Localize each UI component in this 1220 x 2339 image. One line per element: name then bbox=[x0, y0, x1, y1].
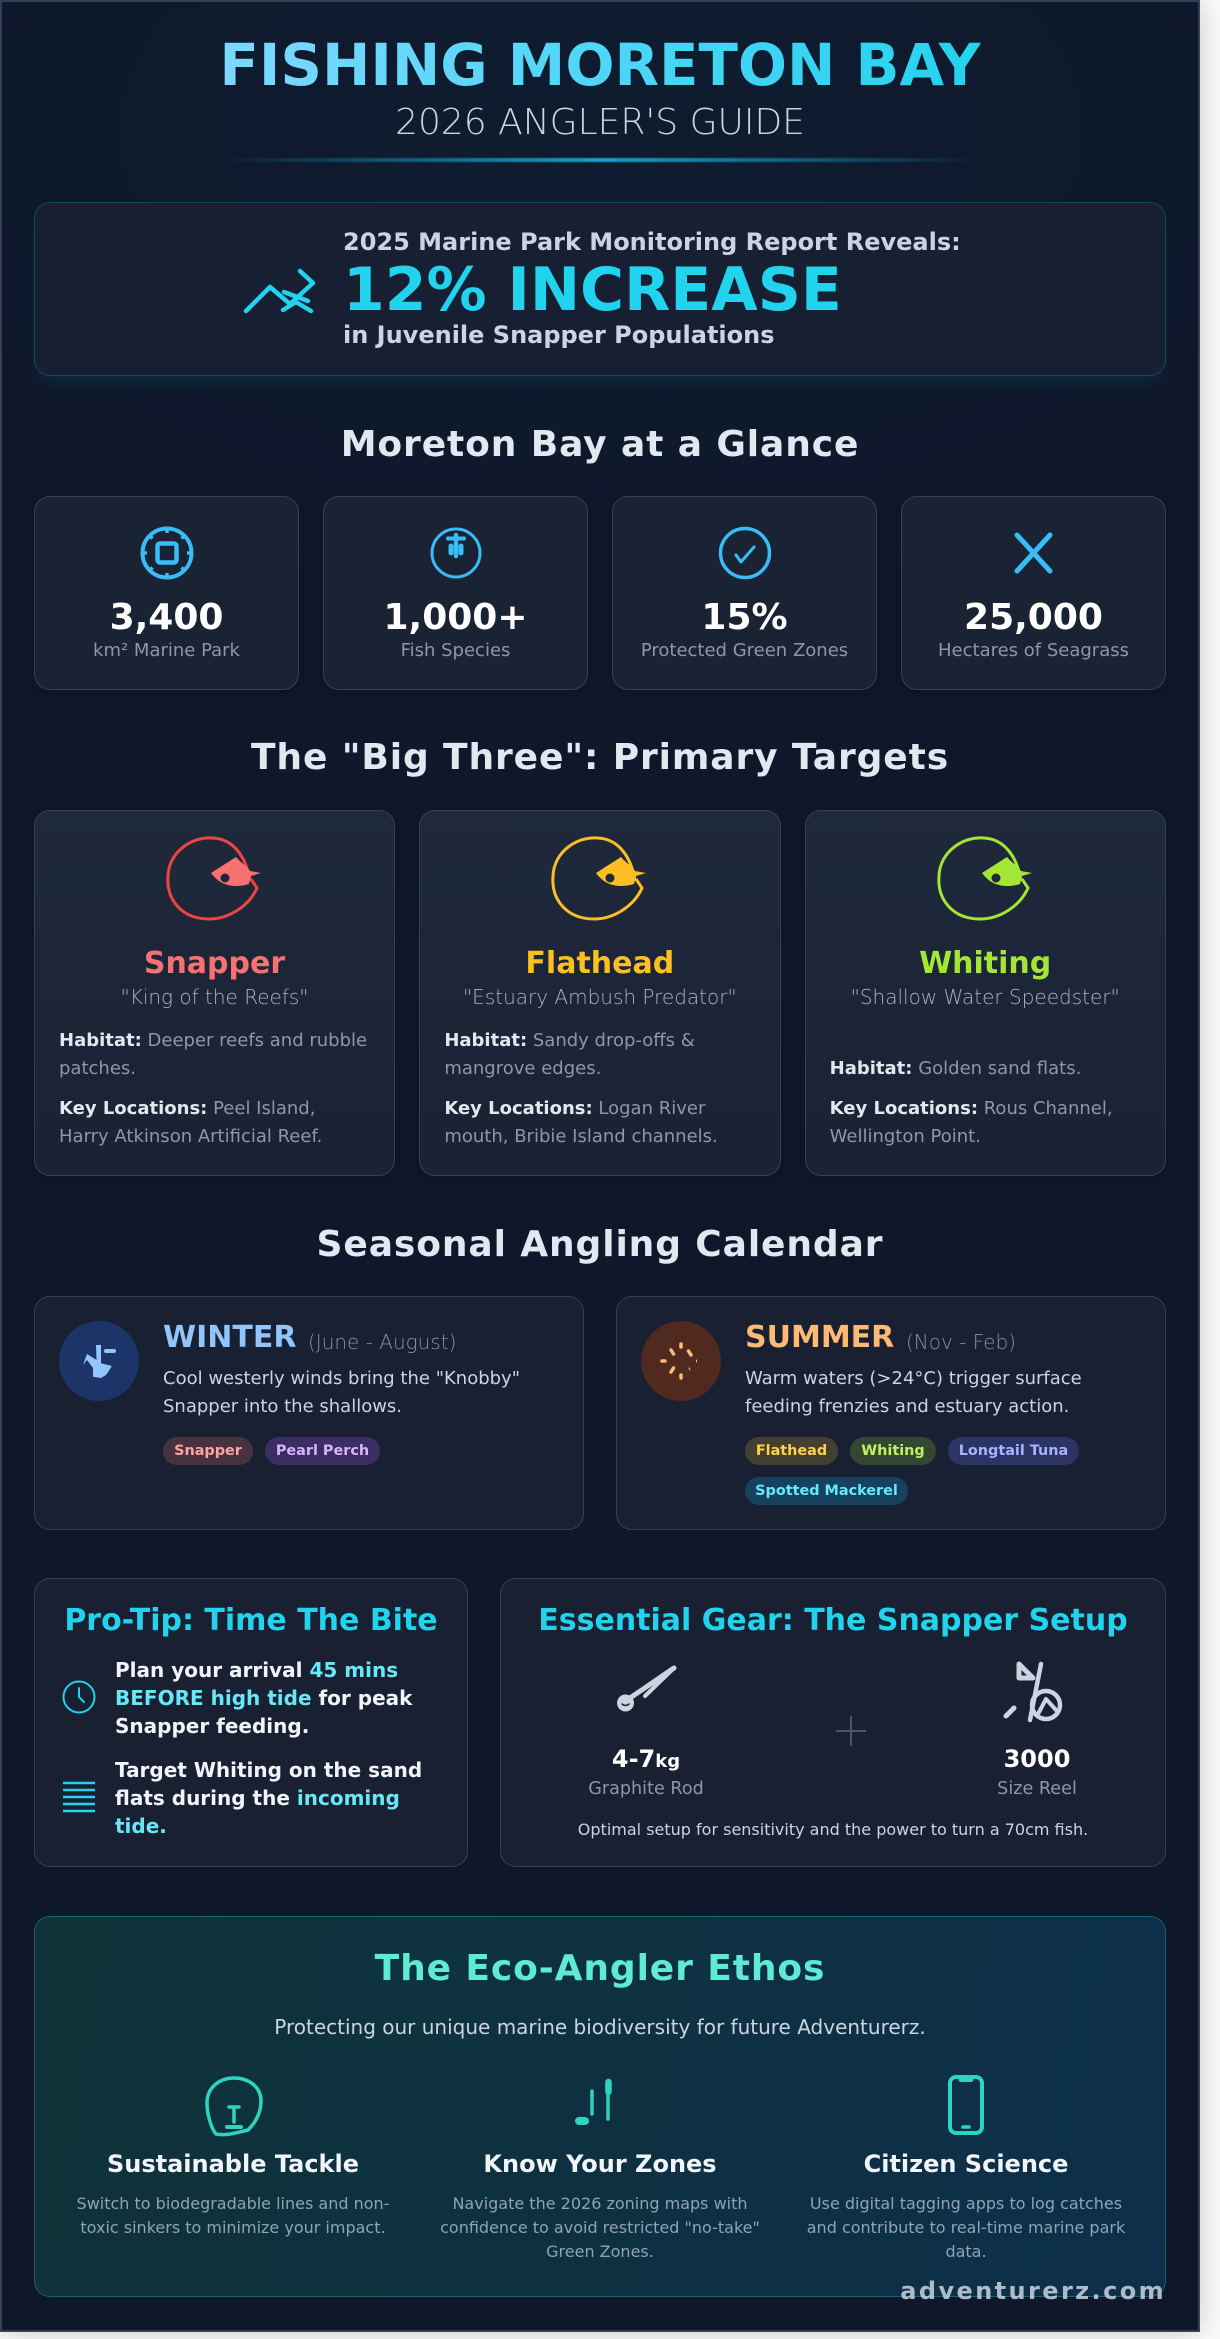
column title: Know Your Zones bbox=[483, 2150, 717, 2178]
key locations: Key Locations: Peel Island, bbox=[59, 1098, 315, 1119]
column text: Switch to biodegradable lines and non- bbox=[77, 2194, 389, 2213]
nickname: "King of the Reefs" bbox=[120, 985, 308, 1009]
label: km² Marine Park bbox=[93, 640, 240, 661]
column title: Sustainable Tackle bbox=[107, 2150, 359, 2178]
season dates: (June - August) bbox=[308, 1330, 456, 1354]
stat card: marine park bbox=[34, 496, 299, 690]
stat card: species bbox=[323, 496, 588, 690]
habitat: Habitat: Sandy drop-offs & bbox=[444, 1030, 695, 1051]
reel label: Size Reel bbox=[997, 1779, 1077, 1799]
nickname: "Estuary Ambush Predator" bbox=[463, 985, 737, 1009]
heading: big three: The "Big Three": Primary Targets bbox=[251, 737, 949, 778]
tip text: whiting bbox=[115, 1758, 422, 1838]
tip text: arrival: Snapper feeding. bbox=[115, 1714, 309, 1738]
icon: whiting bbox=[937, 836, 1032, 920]
report outro: in Juvenile Snapper Populations bbox=[343, 321, 774, 349]
species card: whiting bbox=[805, 810, 1166, 1176]
heading: calendar: Seasonal Angling Calendar bbox=[317, 1224, 883, 1265]
panel: pro tip bbox=[34, 1578, 468, 1867]
heading: The Eco-Angler Ethos bbox=[375, 1948, 825, 1989]
habitat bbox=[444, 1030, 695, 1079]
habitat: Habitat: Golden sand flats. bbox=[830, 1058, 1081, 1079]
column: citizen science bbox=[807, 2075, 1126, 2261]
label: Hectares of Seagrass bbox=[938, 640, 1129, 661]
tag: whiting bbox=[850, 1437, 936, 1465]
key locations: Key Locations: Rous Channel, bbox=[830, 1098, 1113, 1119]
icon: clock bbox=[62, 1680, 96, 1714]
panel: headline stat bbox=[34, 202, 1166, 376]
season name: WINTER bbox=[163, 1320, 296, 1355]
icon: summer badge bbox=[641, 1321, 721, 1401]
description: Snapper into the shallows. bbox=[163, 1396, 402, 1417]
label: Protected Green Zones bbox=[641, 640, 848, 661]
key locations: Harry Atkinson Artificial Reef. bbox=[59, 1126, 322, 1147]
icon: sinker bbox=[205, 2076, 263, 2136]
tip text: arrival: Plan your arrival 45 mins bbox=[115, 1658, 398, 1682]
key locations bbox=[830, 1098, 1113, 1147]
icon: rising trend bbox=[244, 268, 316, 314]
gear note: Optimal setup for sensitivity and the power to turn a 70cm fish. bbox=[578, 1820, 1088, 1839]
heading: Essential Gear: The Snapper Setup bbox=[538, 1603, 1128, 1638]
value: 1,000+ bbox=[383, 597, 528, 638]
panel: winter bbox=[34, 1296, 584, 1530]
reel spec: 3000 bbox=[1004, 1745, 1070, 1773]
icon: zone markers bbox=[575, 2078, 612, 2125]
column: sustainable tackle bbox=[77, 2076, 389, 2237]
season name: SUMMER bbox=[745, 1320, 894, 1355]
key locations: Wellington Point. bbox=[830, 1126, 981, 1147]
panel: essential gear bbox=[500, 1578, 1166, 1867]
header divider bbox=[218, 158, 984, 162]
column text bbox=[807, 2194, 1126, 2261]
icon: fish species bbox=[430, 528, 482, 578]
rod spec: 4-7kg bbox=[612, 1745, 680, 1773]
tag: whiting: Whiting bbox=[861, 1443, 925, 1459]
panel: summer bbox=[616, 1296, 1166, 1530]
report intro: 2025 Marine Park Monitoring Report Reveals: bbox=[343, 228, 961, 256]
icon: phone bbox=[948, 2075, 984, 2135]
plus sign bbox=[836, 1716, 866, 1746]
icon: cross bbox=[1014, 532, 1052, 574]
habitat: mangrove edges. bbox=[444, 1058, 601, 1079]
column text: confidence to avoid restricted "no-take" bbox=[440, 2218, 760, 2237]
panel: eco-angler ethos bbox=[34, 1916, 1166, 2297]
stat card: seagrass bbox=[901, 496, 1166, 690]
value: 3,400 bbox=[110, 597, 223, 638]
tip text: whiting: tide. bbox=[115, 1814, 167, 1838]
watermark: adventurerz.com bbox=[900, 2277, 1166, 2305]
column text: Green Zones. bbox=[546, 2242, 654, 2261]
icon: snapper bbox=[166, 836, 261, 920]
tag: snapper bbox=[163, 1437, 253, 1465]
tag: spotted mackerel bbox=[745, 1477, 908, 1505]
tag: flathead: Flathead bbox=[756, 1443, 827, 1459]
habitat bbox=[59, 1030, 367, 1079]
tag: pearl perch: Pearl Perch bbox=[276, 1443, 369, 1459]
subtitle: 2026 ANGLER'S GUIDE bbox=[395, 102, 805, 143]
tip text: whiting: Target Whiting on the sand bbox=[115, 1758, 422, 1782]
key locations: Key Locations: Logan River bbox=[444, 1098, 705, 1119]
column: know your zones bbox=[440, 2078, 760, 2261]
species name: Whiting bbox=[919, 946, 1051, 981]
stat card: green zones bbox=[612, 496, 877, 690]
tag: snapper: Snapper bbox=[174, 1443, 242, 1459]
habitat: patches. bbox=[59, 1058, 136, 1079]
tag: longtail tuna bbox=[948, 1437, 1079, 1465]
column title: Citizen Science bbox=[864, 2150, 1068, 2178]
icon: winter badge bbox=[59, 1321, 139, 1401]
icon: rod bbox=[617, 1666, 676, 1712]
species card: flathead bbox=[419, 810, 781, 1176]
column text bbox=[77, 2194, 389, 2237]
column text: Use digital tagging apps to log catches bbox=[810, 2194, 1122, 2213]
value: 15% bbox=[701, 597, 788, 638]
heading: Pro-Tip: Time The Bite bbox=[64, 1603, 438, 1638]
tag: flathead bbox=[745, 1437, 838, 1465]
icon: tide lines bbox=[63, 1782, 95, 1812]
key locations bbox=[59, 1098, 322, 1147]
heading: at a glance: Moreton Bay at a Glance bbox=[341, 424, 859, 465]
icon: reel bbox=[1004, 1662, 1062, 1722]
rod label: Graphite Rod bbox=[588, 1779, 704, 1799]
tip text: arrival bbox=[115, 1658, 413, 1738]
description: feeding frenzies and estuary action. bbox=[745, 1396, 1069, 1417]
icon: park compass bbox=[140, 526, 194, 580]
icon: check circle bbox=[718, 526, 772, 580]
species card: snapper bbox=[34, 810, 395, 1176]
tag: spotted mackerel: Spotted Mackerel bbox=[755, 1483, 898, 1499]
tag: longtail tuna: Longtail Tuna bbox=[959, 1443, 1068, 1459]
column text bbox=[440, 2194, 760, 2261]
season dates: (Nov - Feb) bbox=[906, 1330, 1016, 1354]
tip text: arrival: BEFORE high tide for peak bbox=[115, 1686, 412, 1710]
column text: toxic sinkers to minimize your impact. bbox=[80, 2218, 386, 2237]
description bbox=[163, 1368, 520, 1417]
tip text: whiting: flats during the incoming bbox=[115, 1786, 400, 1810]
description: Warm waters (>24°C) trigger surface bbox=[745, 1368, 1082, 1389]
tag: pearl perch bbox=[265, 1437, 380, 1465]
description bbox=[745, 1368, 1082, 1417]
intro text: Protecting our unique marine biodiversity for future Adventurerz. bbox=[274, 2015, 926, 2039]
nickname: "Shallow Water Speedster" bbox=[851, 985, 1120, 1009]
value: 25,000 bbox=[964, 597, 1103, 638]
species name: Snapper bbox=[144, 946, 285, 981]
label: Fish Species bbox=[401, 640, 510, 661]
column text: and contribute to real-time marine park bbox=[807, 2218, 1125, 2237]
column text: data. bbox=[945, 2242, 987, 2261]
icon: flathead bbox=[551, 836, 646, 920]
key locations bbox=[444, 1098, 718, 1147]
species name: Flathead bbox=[525, 946, 674, 981]
column text: Navigate the 2026 zoning maps with bbox=[452, 2194, 748, 2213]
key locations: mouth, Bribie Island channels. bbox=[444, 1126, 718, 1147]
description: Cool westerly winds bring the "Knobby" bbox=[163, 1368, 520, 1389]
big stat: 12% INCREASE bbox=[343, 255, 842, 325]
habitat: Habitat: Deeper reefs and rubble bbox=[59, 1030, 367, 1051]
title: FISHING MORETON BAY bbox=[219, 31, 981, 99]
